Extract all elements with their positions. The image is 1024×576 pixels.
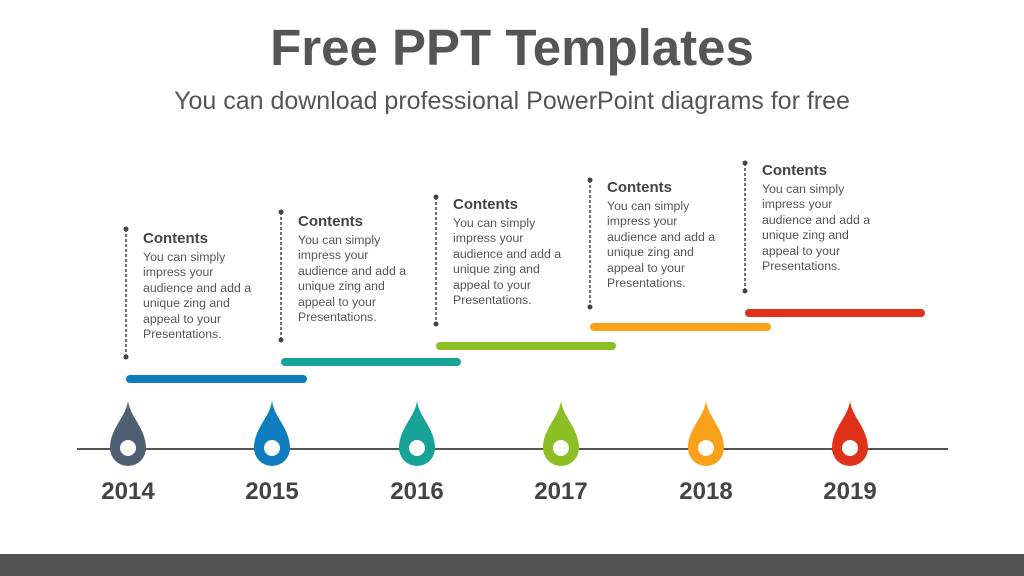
- year labels: 2017: [534, 478, 588, 505]
- text block 2016: You can simply impress your audience and add a unique zing and appeal to your Presentations.: [453, 216, 561, 307]
- text block 2017: Contents: [607, 179, 672, 196]
- bars: [130, 313, 921, 379]
- year labels: 2016: [390, 478, 444, 505]
- footer bar: [0, 554, 1024, 576]
- year labels: [101, 478, 877, 505]
- year labels: 2014: [101, 478, 155, 505]
- text block 2016: Contents: [453, 196, 518, 213]
- text block 2014: Contents: [143, 230, 208, 247]
- text block 2018: Contents: [762, 162, 827, 179]
- dashed connectors: [126, 163, 745, 357]
- text block 2015: Contents: [298, 213, 363, 230]
- text block 2018: You can simply impress your audience and add a unique zing and appeal to your Presentations.: [762, 182, 870, 273]
- subtitle: You can download professional PowerPoint diagrams for free: [174, 87, 850, 115]
- text block 2015: You can simply impress your audience and add a unique zing and appeal to your Presentations.: [298, 233, 406, 324]
- drop markers: [110, 400, 868, 466]
- title: Free PPT Templates: [270, 19, 754, 76]
- text block 2017: You can simply impress your audience and add a unique zing and appeal to your Presentations.: [607, 199, 715, 290]
- year labels: 2018: [679, 478, 733, 505]
- year labels: 2015: [245, 478, 299, 505]
- text block 2014: You can simply impress your audience and add a unique zing and appeal to your Presentations.: [143, 250, 251, 341]
- year labels: 2019: [823, 478, 877, 505]
